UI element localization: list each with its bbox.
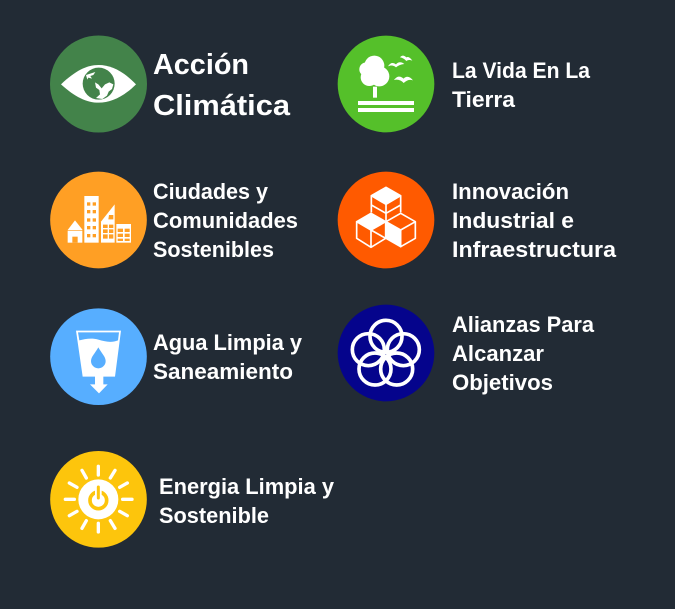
label: Innovación Industrial e Infraestructura xyxy=(452,179,617,262)
panel: Ciudades y Comunidades Sostenibles xyxy=(50,172,298,268)
label: La Vida En La Tierra xyxy=(452,58,591,112)
label: Energia Limpia y Sostenible xyxy=(159,474,335,528)
panel: Energia Limpia y Sostenible xyxy=(50,451,335,548)
label: Ciudades y Comunidades Sostenibles: Comunidades xyxy=(153,208,298,233)
label: Agua Limpia y Saneamiento: Saneamiento xyxy=(153,359,293,384)
icon: water glass xyxy=(50,308,147,405)
icon: tree and birds xyxy=(338,36,434,132)
icon: five interlocking rings xyxy=(338,305,434,401)
heading: Acción Climática xyxy=(153,49,291,122)
label: Alianzas Para Alcanzar Objetivos: Alcanzar xyxy=(452,341,544,366)
icon: eye with globe xyxy=(50,35,147,132)
label: Ciudades y Comunidades Sostenibles: Ciudades y xyxy=(153,179,269,204)
label: Innovación Industrial e Infraestructura: Innovación xyxy=(452,179,569,204)
label: Innovación Industrial e Infraestructura: Industrial e xyxy=(452,208,574,233)
label: Alianzas Para Alcanzar Objetivos: Objetivos xyxy=(452,370,553,395)
icon: stacked cubes xyxy=(338,172,434,268)
label: Alianzas Para Alcanzar Objetivos: Alianzas Para xyxy=(452,312,595,337)
label: Alianzas Para Alcanzar Objetivos xyxy=(452,312,595,395)
label: Ciudades y Comunidades Sostenibles: Sostenibles xyxy=(153,237,274,262)
label: La Vida En La Tierra: La Vida En La xyxy=(452,58,591,83)
panel: Alianzas Para Alcanzar Objetivos xyxy=(338,305,595,401)
panel: La Vida En La Tierra xyxy=(338,36,591,132)
heading: Acción Climática: Acción xyxy=(153,49,249,81)
icon: city buildings xyxy=(50,172,147,268)
icon: sun with power button xyxy=(50,451,147,548)
label: Agua Limpia y Saneamiento xyxy=(153,330,303,384)
panel: Acción Climática xyxy=(50,35,291,132)
label: Innovación Industrial e Infraestructura: Infraestructura xyxy=(452,237,617,262)
panel: Innovación Industrial e Infraestructura xyxy=(338,172,617,268)
label: La Vida En La Tierra: Tierra xyxy=(452,87,516,112)
label: Energia Limpia y Sostenible: Energia Limpia y xyxy=(159,474,335,499)
label: Energia Limpia y Sostenible: Sostenible xyxy=(159,503,269,528)
label: Ciudades y Comunidades Sostenibles xyxy=(153,179,298,262)
panel: Agua Limpia y Saneamiento xyxy=(50,308,303,405)
heading: Acción Climática: Climática xyxy=(153,90,291,122)
label: Agua Limpia y Saneamiento: Agua Limpia y xyxy=(153,330,303,355)
